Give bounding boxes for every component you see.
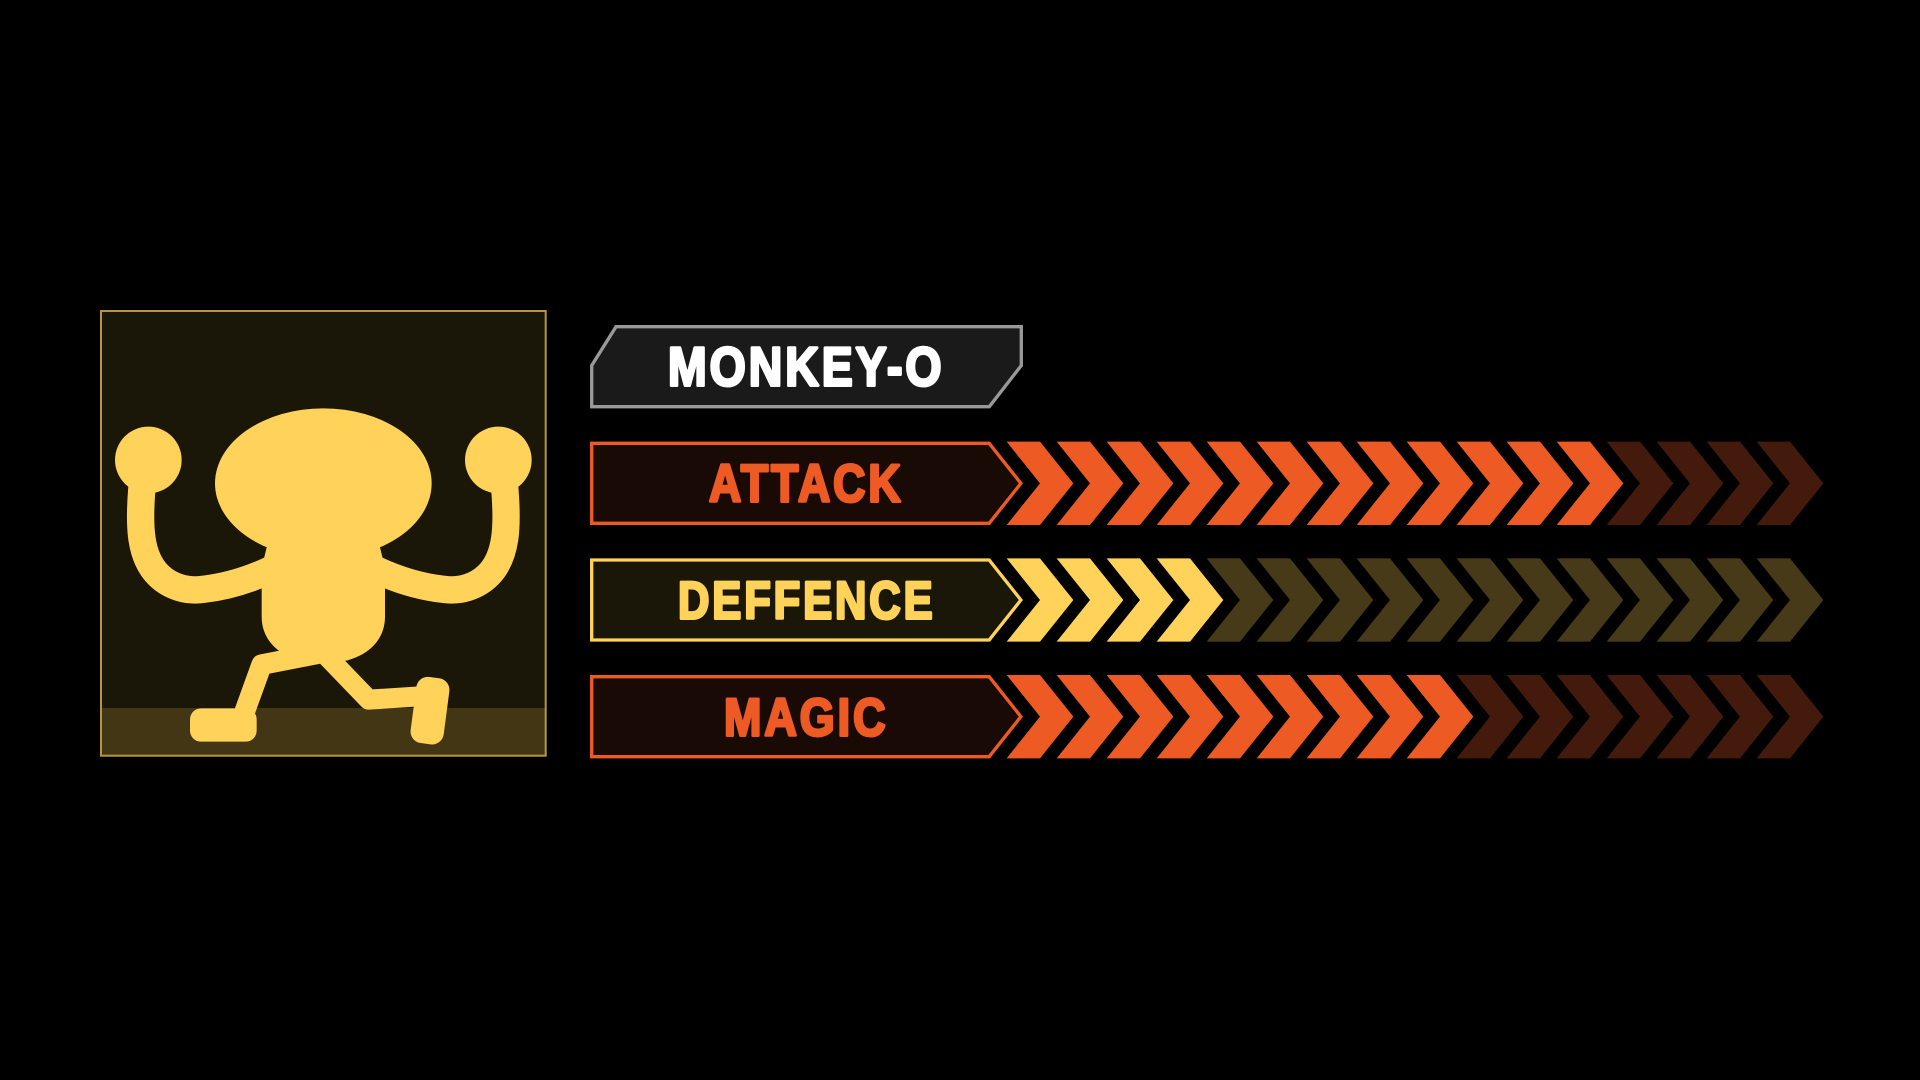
name text: MONKEY-O — [668, 336, 944, 398]
right leg — [317, 646, 420, 700]
magic label — [592, 677, 1021, 757]
left fist — [115, 427, 182, 493]
icon: monkey character — [115, 408, 532, 746]
magic chevrons: 9 of 16 — [1007, 675, 1823, 758]
right arm — [377, 483, 506, 590]
stat row: magic — [592, 675, 1823, 758]
left arm — [141, 483, 270, 590]
stat row: defence — [592, 558, 1823, 642]
attack chevrons: 12 of 16 — [1007, 442, 1823, 525]
head — [215, 408, 432, 558]
left foot — [190, 708, 257, 742]
panel: character portrait — [100, 310, 547, 757]
right foot — [409, 675, 451, 746]
stat row: attack — [592, 442, 1823, 525]
panel background — [100, 310, 547, 757]
defence label — [592, 560, 1021, 640]
attack label: ATTACK — [709, 454, 904, 514]
attack label — [592, 443, 1021, 523]
magic label: MAGIC — [724, 688, 888, 748]
name plate shape — [592, 327, 1021, 407]
panel border — [101, 311, 546, 756]
name plate — [592, 327, 1021, 407]
ground strip — [100, 708, 547, 757]
defence chevrons: 4 of 16 — [1007, 558, 1823, 642]
body — [262, 500, 385, 663]
defence label: DEFFENCE — [678, 572, 936, 630]
left leg — [242, 653, 323, 720]
right fist — [465, 427, 532, 493]
